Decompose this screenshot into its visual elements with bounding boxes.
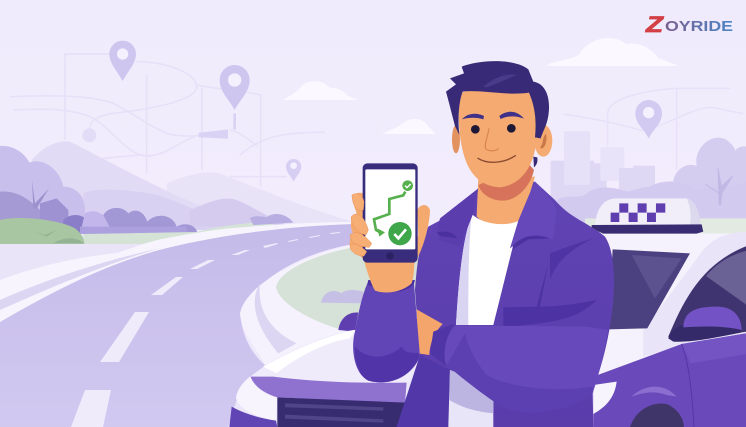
trees right (557, 138, 746, 240)
dashes (71, 232, 340, 427)
phone body (363, 163, 418, 263)
hand under arm (417, 309, 443, 355)
logo wordmark: OYRIDE (665, 18, 733, 35)
hair (446, 61, 549, 138)
eyebrows (462, 112, 524, 119)
taxi car (229, 198, 746, 427)
hood (248, 330, 427, 387)
logo (645, 12, 733, 37)
ear right (534, 125, 552, 157)
road surface (0, 224, 360, 427)
route line on screen (374, 192, 405, 233)
bushes and hill left (0, 146, 293, 257)
collars (437, 188, 478, 247)
roadside verge (0, 244, 175, 285)
wheel arch (632, 387, 677, 397)
taxi roof sign (592, 198, 703, 234)
palm (350, 193, 430, 293)
fingers (350, 194, 372, 256)
cloud: left middle (283, 81, 358, 100)
far mirror (338, 313, 358, 332)
mountains left (32, 141, 353, 230)
jacket torso (397, 182, 614, 427)
grass island and inner curb (240, 243, 440, 365)
nose (485, 128, 499, 151)
bumper (229, 407, 277, 427)
side window (668, 246, 746, 342)
cuff (430, 323, 455, 366)
grille (277, 397, 407, 427)
home button (386, 252, 394, 260)
map pin: right (635, 100, 662, 138)
wing mirror (668, 325, 742, 342)
headlight (236, 377, 277, 421)
crossed forearm (444, 325, 608, 412)
map pin: small (286, 159, 301, 182)
neck shadow (478, 163, 534, 201)
cloud: center (382, 119, 436, 134)
eyes (471, 125, 480, 134)
hood stripe (251, 377, 407, 403)
big check badge (388, 222, 412, 245)
t-shirt (456, 214, 519, 325)
roof and body white (587, 233, 746, 380)
windshield (608, 249, 690, 329)
phone in hand (350, 163, 430, 293)
map route lines: right (563, 88, 743, 170)
logo mark Z: Z (645, 12, 665, 37)
skyline (551, 131, 655, 201)
head (446, 61, 552, 201)
map pin: center (82, 65, 250, 142)
man (353, 177, 614, 427)
mouth (478, 156, 515, 162)
cloud: top right (545, 38, 678, 66)
map route lines: left (10, 54, 325, 187)
road (0, 222, 360, 427)
neck (477, 177, 535, 225)
jacket folds (503, 263, 597, 327)
face (459, 83, 537, 187)
ear left (452, 125, 460, 153)
small check badge (402, 180, 413, 191)
door purple (593, 333, 746, 427)
raised sleeve (353, 283, 420, 382)
phone screen (365, 169, 415, 249)
road white shoulder (0, 222, 352, 322)
front small headlight (593, 382, 617, 414)
map pin: large left (109, 41, 136, 81)
lower left jacket shadow (397, 355, 450, 427)
